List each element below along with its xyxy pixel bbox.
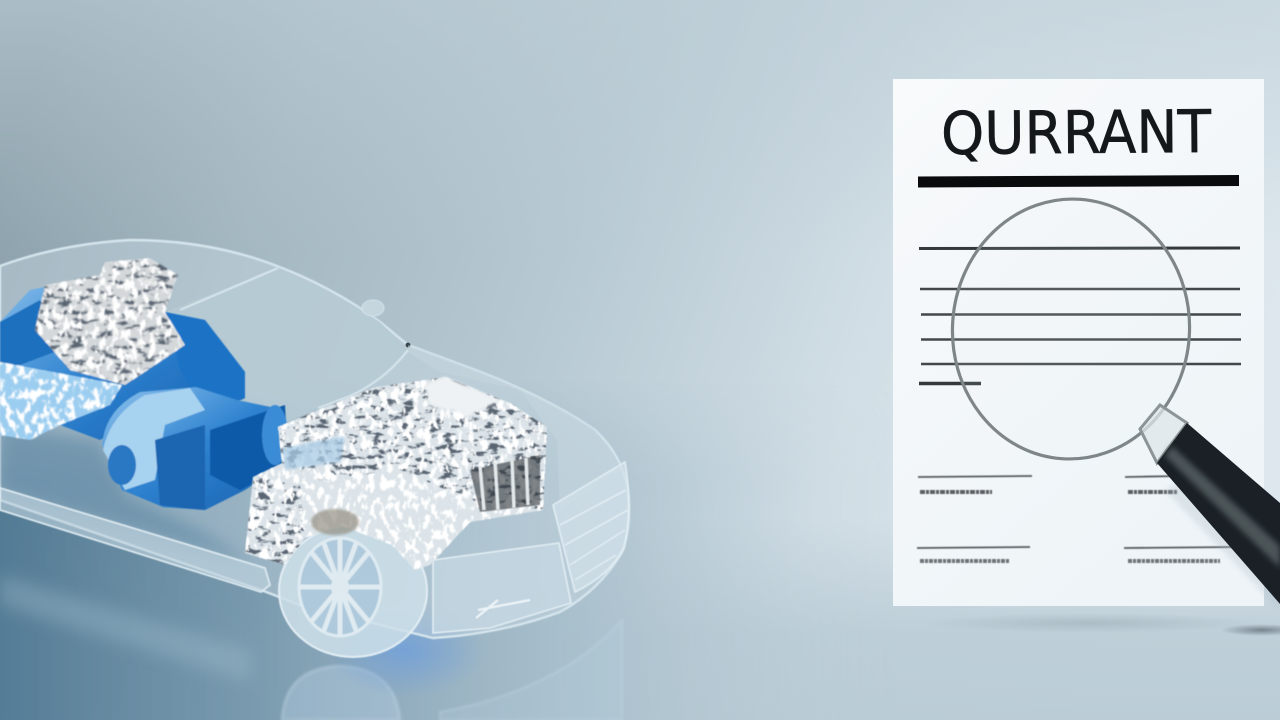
dark cabin floor area	[0, 425, 255, 565]
wheel	[279, 525, 427, 657]
roof and windshield lines	[180, 268, 408, 408]
lower front panel	[433, 543, 571, 633]
side sill	[0, 488, 270, 592]
radiator slats	[480, 458, 528, 510]
blue hose	[282, 436, 345, 470]
engine cover highlight	[425, 377, 500, 415]
grille mark	[476, 600, 530, 618]
black handle	[1157, 423, 1280, 604]
signature blocks	[917, 476, 1235, 561]
document title: QURRANT	[941, 97, 1212, 168]
windshield	[165, 268, 408, 425]
car body shell	[0, 240, 629, 638]
metal ferrule	[1140, 405, 1187, 463]
blue glow beneath the car	[325, 602, 485, 698]
white flakes	[245, 377, 547, 570]
front bumper	[553, 462, 629, 592]
dark speckle upper engine	[278, 377, 547, 510]
bumper slats	[560, 490, 628, 580]
shadow under the document	[920, 613, 1280, 636]
blue electric motor and shaft	[102, 387, 290, 510]
rear drivetrain cluster	[0, 258, 245, 440]
radiator block	[470, 455, 540, 512]
handle highlight	[1165, 446, 1280, 568]
handle shadow	[1168, 484, 1273, 596]
mirror bump	[362, 300, 384, 316]
magnifying glass	[944, 191, 1280, 610]
document page	[893, 79, 1264, 606]
hood	[408, 345, 620, 510]
heavy title rule	[918, 175, 1239, 188]
dark speckle left engine	[245, 477, 305, 565]
front engine	[245, 377, 547, 570]
floor reflection of the car	[0, 575, 622, 720]
windshield corner dot	[406, 343, 410, 347]
transparent car	[0, 240, 629, 657]
body text lines	[919, 248, 1241, 384]
tan engine part	[311, 509, 359, 535]
lens ring	[944, 191, 1198, 467]
